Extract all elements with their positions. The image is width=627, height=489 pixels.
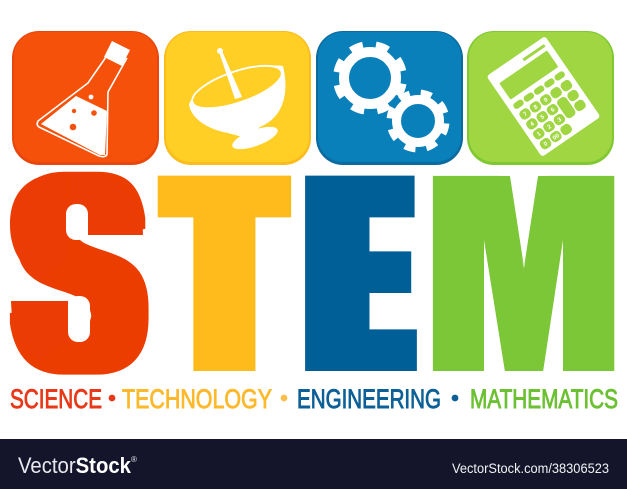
icon: calculator: 0	[543, 141, 550, 148]
icon: calculator: 9	[543, 97, 550, 104]
tile: mathematics calculator	[467, 31, 614, 165]
bullet	[109, 395, 115, 401]
tile: science flask	[12, 31, 159, 165]
tile: engineering gears	[316, 31, 463, 165]
footer bar	[0, 439, 627, 489]
tile: technology bowl	[164, 31, 311, 165]
image id: VectorStock.com/38306523	[452, 461, 609, 476]
icon: calculator	[486, 36, 601, 157]
subtitle: science: SCIENCE	[10, 384, 102, 414]
icon: calculator: 5	[540, 114, 546, 121]
icon: flask	[37, 41, 130, 157]
watermark logo: VectorStock	[18, 453, 132, 478]
subtitle: engineering: ENGINEERING	[297, 384, 441, 414]
bullet	[281, 395, 287, 401]
heading: letter T: T	[175, 124, 273, 422]
icon: calculator: 7	[523, 111, 529, 118]
heading: letter S: S	[21, 121, 140, 425]
icon: calculator: 6	[550, 107, 557, 114]
heading: letter E: E	[322, 126, 397, 422]
icon: small gear	[388, 91, 448, 151]
icon: large gear	[332, 40, 408, 116]
subtitle: technology: TECHNOLOGY	[122, 384, 272, 414]
icon: calculator: 4	[529, 121, 536, 128]
registered mark: ®	[131, 455, 137, 464]
icon: calculator: 1	[536, 131, 543, 138]
icon: calculator: 3	[557, 117, 564, 124]
heading: letter M: M	[430, 116, 617, 430]
icon: spinning top bowl	[188, 48, 286, 154]
bullet	[452, 395, 458, 401]
icon: calculator: 00	[552, 133, 561, 142]
icon: calculator: 2	[547, 124, 553, 131]
icon: calculator: 8	[533, 104, 540, 111]
